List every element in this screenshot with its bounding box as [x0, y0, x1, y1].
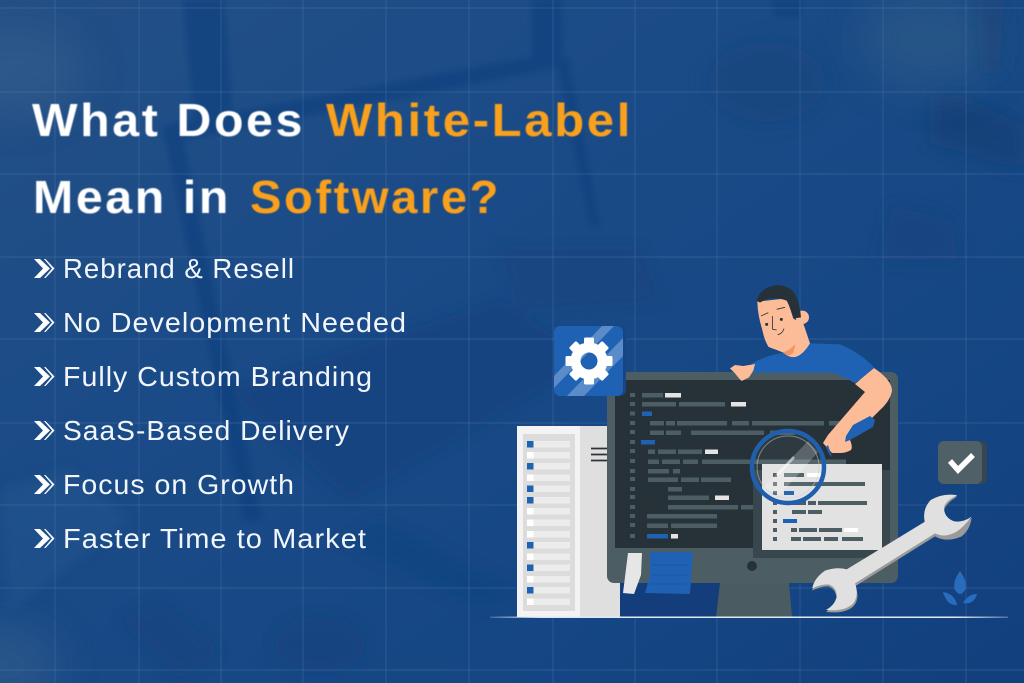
check badge — [938, 441, 987, 484]
server tower — [517, 426, 620, 617]
zoomed code panel — [753, 464, 890, 558]
illustration: developer at computer — [490, 285, 1008, 618]
paper notes — [623, 552, 693, 594]
bullet: SaaS-Based Delivery: SaaS-Based Delivery — [63, 415, 350, 446]
code lines on screen — [630, 393, 846, 538]
title: Software? — [250, 171, 501, 223]
bullet: Fully Custom Branding: Fully Custom Branding — [63, 361, 373, 392]
ground line — [490, 616, 1008, 618]
title — [32, 94, 633, 223]
gear icon tile — [554, 326, 626, 396]
title: Mean in — [33, 171, 231, 223]
dark block behind monitor — [620, 583, 720, 617]
bullet: No Development Needed: No Development Needed — [63, 307, 407, 338]
shirt — [752, 343, 874, 383]
magnifier lens — [752, 431, 824, 503]
bullet: Faster Time to Market: Faster Time to Market — [63, 523, 367, 554]
hair — [757, 285, 801, 319]
title: White-Label — [326, 94, 633, 146]
face — [757, 298, 804, 350]
arm — [823, 368, 892, 453]
neck — [768, 317, 810, 357]
facial features — [780, 318, 783, 321]
wrench — [812, 495, 972, 612]
monitor stand — [716, 583, 792, 617]
title: What Does — [32, 94, 305, 146]
left hand on monitor — [730, 364, 755, 381]
bullet: Focus on Growth: Focus on Growth — [63, 469, 295, 500]
plant leaves — [943, 571, 977, 605]
handle — [845, 416, 875, 442]
monitor — [607, 372, 898, 583]
bullet list — [34, 253, 407, 554]
person with magnifier — [730, 285, 892, 457]
bullet: Rebrand & Resell: Rebrand & Resell — [63, 253, 295, 284]
